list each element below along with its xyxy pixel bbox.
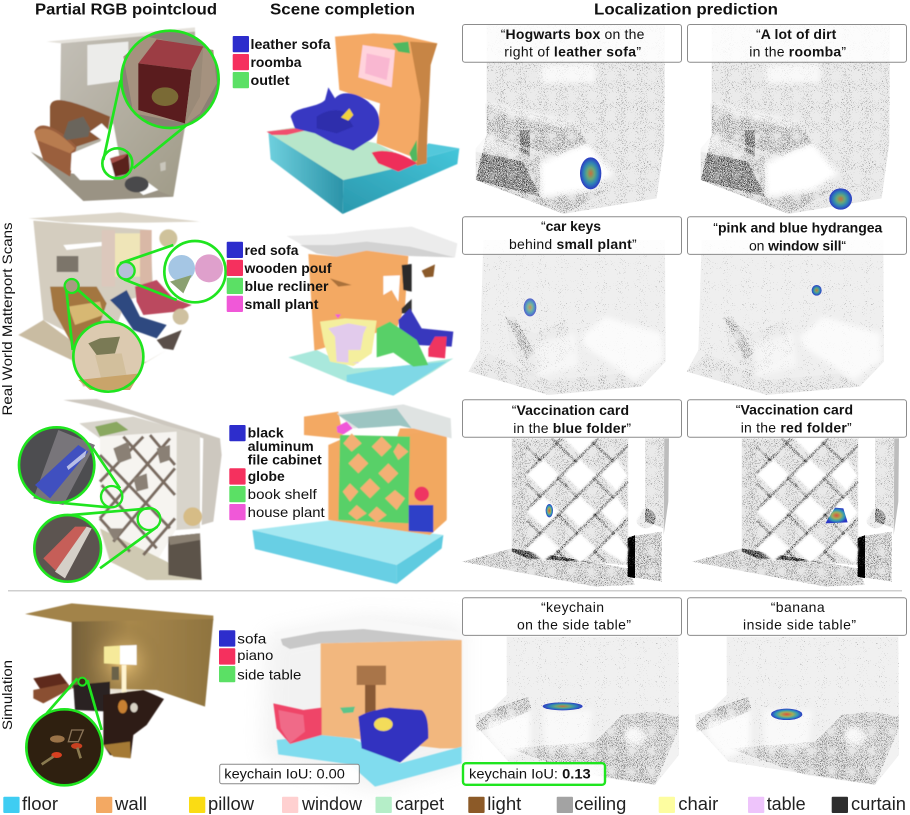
legend: row 3 objects: globe — [248, 468, 285, 484]
legend: row 1 objects: leather sofa — [250, 36, 331, 52]
heatmap: banana — [771, 709, 802, 720]
legend item: ceiling: ceiling — [574, 794, 626, 814]
legend: row 4 objects: piano — [237, 647, 274, 663]
legend item: pillow — [189, 794, 255, 814]
heatmap: red folder — [825, 508, 848, 523]
panel: row 4 RGB pointcloud with keychain lens — [25, 603, 213, 785]
legend: row 2 objects — [227, 242, 332, 312]
heading: Scene completion: Scene completion — [270, 2, 415, 18]
query box: hydrangea: “pink and blue hydrangea — [713, 219, 883, 235]
panel: localization row 4 right — [695, 637, 899, 785]
query box: vaccination card blue folder — [462, 400, 682, 437]
gray side wall strip — [894, 438, 899, 535]
legend item: chair — [659, 794, 718, 814]
panel: localization row 3 right — [692, 423, 899, 587]
legend: row 2 objects: blue recliner — [244, 278, 329, 294]
panel: row 2 RGB pointcloud with flower lenses — [18, 212, 226, 392]
label: keychain IoU 0.00: keychain IoU: 0.00 — [224, 766, 345, 782]
legend item: chair: chair — [678, 794, 718, 814]
legend item: light: light — [487, 794, 521, 814]
lens: keychain close-up — [26, 709, 102, 785]
label: keychain IoU 0.13 — [463, 763, 605, 785]
lens: blue folder close-up — [19, 427, 95, 505]
divider between real and simulated rows — [8, 590, 902, 592]
query box: keychain: “keychain — [541, 599, 604, 615]
query box: banana: inside side table” — [743, 616, 856, 632]
lens: red folder close-up — [34, 515, 101, 582]
panel: row 3 scene completion — [252, 404, 452, 584]
legend item: window: window — [301, 794, 363, 814]
legend: row 4 objects — [219, 630, 302, 682]
heatmap: Hogwarts box — [580, 157, 601, 189]
query box: keychain — [462, 598, 682, 635]
target marker circles row 2 — [65, 262, 135, 293]
heading: Localization prediction: Localization prediction — [594, 2, 778, 18]
query box: Hogwarts box: right of leather sofa” — [504, 44, 641, 60]
query box: Hogwarts box — [462, 24, 682, 62]
legend item: floor — [3, 794, 58, 814]
legend: row 1 objects: roomba — [250, 54, 302, 70]
lens: hydrangea close-up — [164, 241, 226, 302]
target marker circle row 4 — [78, 678, 86, 686]
legend item: curtain: curtain — [851, 794, 906, 814]
query box: banana — [688, 598, 906, 635]
label: keychain IoU 0.13: keychain IoU: 0.13 — [469, 766, 591, 782]
panel: localization row 3 left — [462, 423, 669, 587]
soft shadow — [263, 615, 463, 792]
connector lines to keychain lens — [47, 678, 102, 730]
label: keychain IoU 0.00 — [220, 764, 359, 784]
legend: row 3 objects: black — [248, 425, 284, 441]
query box: Hogwarts box: “Hogwarts box on the — [501, 26, 645, 42]
semantic colour legend — [3, 794, 906, 814]
legend: row 2 objects: red sofa — [244, 242, 299, 258]
legend item: table: table — [767, 794, 806, 814]
panel: row 4 scene completion — [263, 615, 463, 792]
legend: row 4 objects: side table — [237, 666, 302, 682]
query box: car keys: behind small plant” — [509, 236, 637, 252]
lens: small plant close-up — [73, 322, 143, 392]
target marker circle — [102, 148, 132, 178]
legend item: floor: floor — [22, 794, 58, 814]
legend: row 3 objects: house plant — [248, 504, 325, 520]
lens: Hogwarts box close-up — [121, 31, 219, 128]
legend: row 3 objects: book shelf — [248, 486, 317, 502]
connector lines to row 2 lenses — [66, 245, 177, 350]
panel: row 3 RGB pointcloud with folder lenses — [19, 399, 222, 582]
panel: localization row 1 right — [701, 25, 890, 214]
panel: localization row 4 left — [475, 637, 679, 785]
heading: Partial RGB pointcloud: Partial RGB pointcloud — [35, 2, 217, 18]
legend item: table — [748, 794, 806, 814]
heatmap: hydrangea — [812, 285, 822, 296]
query box: vaccination card red folder: in the red folder” — [741, 420, 852, 436]
query box: A lot of dirt: in the roomba” — [749, 44, 846, 60]
legend: row 3 objects — [229, 425, 325, 520]
legend item: carpet: carpet — [395, 794, 444, 814]
panel: row 1 scene completion — [267, 33, 459, 214]
query box: vaccination card red folder — [688, 400, 906, 437]
query box: car keys — [462, 217, 682, 254]
query box: hydrangea — [688, 217, 906, 254]
legend: row 3 objects: aluminum — [248, 438, 314, 454]
query box: A lot of dirt: “A lot of dirt — [756, 26, 837, 42]
query box: vaccination card blue folder: “Vaccination card — [512, 402, 629, 418]
query box: A lot of dirt — [688, 24, 906, 62]
query box: keychain: on the side table” — [517, 616, 631, 632]
query box: hydrangea: on window sill“ — [749, 237, 846, 253]
query box: banana: “banana — [771, 599, 825, 615]
connector lines to lens — [103, 80, 187, 168]
legend: row 2 objects: wooden pouf — [244, 260, 332, 276]
panel: row 1 RGB pointcloud with Hogwarts box lens — [31, 27, 219, 201]
gray side wall strip — [664, 438, 669, 535]
legend item: wall — [96, 794, 147, 814]
heatmap: keychain — [543, 702, 583, 710]
heatmap: blue folder — [546, 504, 553, 517]
legend item: wall: wall — [114, 794, 147, 814]
legend item: pillow: pillow — [208, 794, 255, 814]
legend item: light — [468, 794, 521, 814]
query box: vaccination card red folder: “Vaccination card — [736, 402, 853, 418]
legend: row 2 objects: small plant — [244, 296, 319, 312]
target marker circles row 3 — [101, 486, 160, 530]
query box: car keys: “car keys — [541, 218, 601, 234]
panel: row 2 scene completion — [287, 227, 457, 396]
heatmap: dirt in roomba — [829, 188, 852, 210]
legend: row 3 objects: file cabinet — [248, 451, 322, 467]
panel: localization row 1 left — [476, 25, 665, 214]
legend: row 1 objects: outlet — [250, 72, 290, 88]
legend: row 1 objects — [233, 36, 331, 88]
legend: row 4 objects: sofa — [237, 630, 267, 646]
panel: localization row 2 right — [687, 240, 884, 395]
heatmap: car keys — [524, 298, 536, 316]
panel: localization row 2 left — [468, 240, 666, 395]
query box: vaccination card blue folder: in the blue folder” — [513, 420, 631, 436]
connector lines to row 3 lenses — [55, 447, 157, 568]
